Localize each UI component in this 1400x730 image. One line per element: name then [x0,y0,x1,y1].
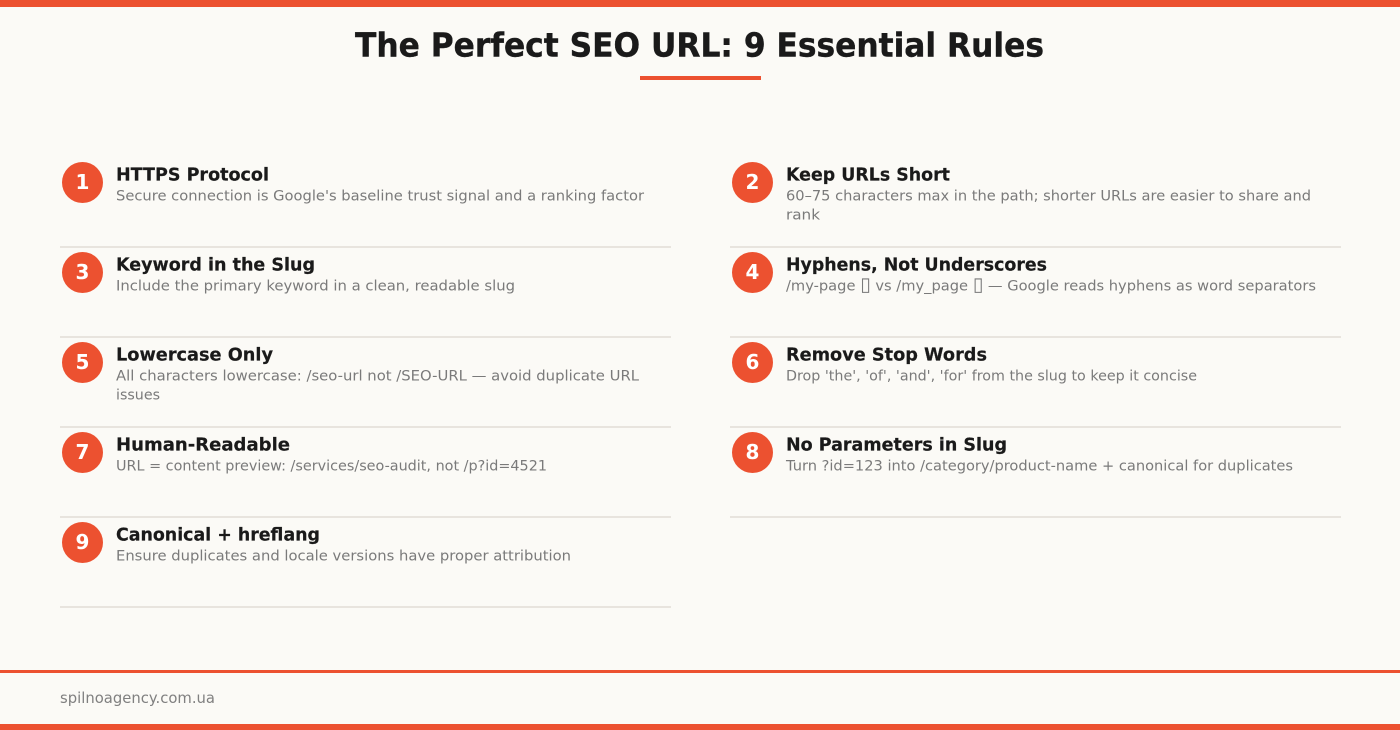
heading 4: Hyphens, Not Underscores [786,256,1047,276]
number badge 8 [732,432,773,473]
rule 8: No Parameters in Slug [730,432,1341,518]
number badge 5 [62,342,103,383]
description 7: URL = content preview: /services/seo-audit, not /p?id=4521 [116,458,547,474]
description 5 [116,368,639,404]
description 9: Ensure duplicates and locale versions have proper attribution [116,548,571,564]
description 5: issues [116,388,160,404]
heading 7: Human-Readable [116,436,290,456]
heading 8: No Parameters in Slug [786,436,1007,456]
number badge 3 [62,252,103,293]
heading 3: Keyword in the Slug [116,256,315,276]
number badge 6: 6 [746,350,759,374]
rule 6: Remove Stop Words [730,342,1341,428]
description 2: 60–75 characters max in the path; shorter URLs are easier to share and [786,188,1311,204]
heading 5: Lowercase Only [116,346,274,366]
heading 1: HTTPS Protocol [116,166,269,186]
bottom accent bar [0,724,1400,730]
description 4: /my-page ▯ vs /my_page ▯ — Google reads hyphens as word separators [786,274,1316,296]
heading 9: Canonical + hreflang [116,526,320,546]
number badge 4 [732,252,773,293]
rule 4: Hyphens, Not Underscores [730,252,1341,338]
title: The Perfect SEO URL: 9 Essential Rules [355,26,1044,64]
rule 3: Keyword in the Slug [60,252,671,338]
rule 7: Human-Readable [60,432,671,518]
top accent bar [0,0,1400,7]
rule 2: Keep URLs Short [730,162,1341,248]
description 6: Drop 'the', 'of', 'and', 'for' from the slug to keep it concise [786,368,1197,384]
heading 2: Keep URLs Short [786,166,950,186]
number badge 8: 8 [746,440,759,464]
number badge 9: 9 [76,530,89,554]
number badge 4: 4 [746,260,759,284]
description 2 [786,188,1311,224]
description 3: Include the primary keyword in a clean, readable slug [116,278,515,294]
number badge 2 [732,162,773,203]
title underline [640,76,761,80]
rule 5: Lowercase Only [60,342,671,428]
footer website: spilnoagency.com.ua [60,689,215,707]
heading 6: Remove Stop Words [786,346,987,366]
number badge 9 [62,522,103,563]
description 1: Secure connection is Google's baseline trust signal and a ranking factor [116,188,644,204]
number badge 6 [732,342,773,383]
number badge 5: 5 [76,350,89,374]
number badge 2: 2 [746,170,759,194]
number badge 7: 7 [76,440,89,464]
description 2: rank [786,208,821,224]
number badge 3: 3 [76,260,89,284]
footer rule [0,670,1400,673]
rule 1: HTTPS Protocol [60,162,671,248]
number badge 1: 1 [76,170,89,194]
number badge 1 [62,162,103,203]
description 8: Turn ?id=123 into /category/product-name + canonical for duplicates [785,458,1293,474]
description 5: All characters lowercase: /seo-url not /SEO-URL — avoid duplicate URL [116,368,639,384]
rule 9: Canonical + hreflang [60,522,671,608]
number badge 7 [62,432,103,473]
